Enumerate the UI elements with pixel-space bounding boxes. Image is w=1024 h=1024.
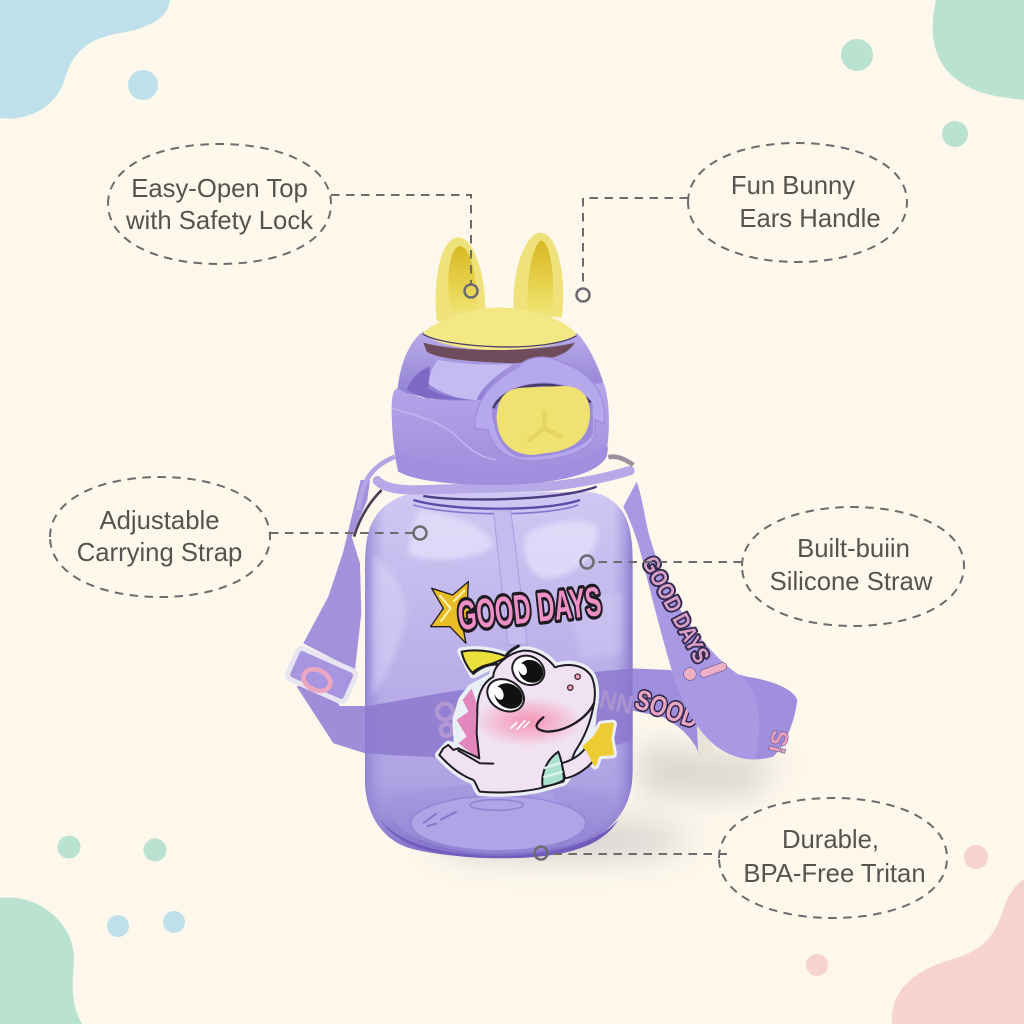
button recess	[492, 382, 593, 457]
callout: bunny ears handle	[576, 143, 907, 302]
collar highlight curve	[393, 408, 497, 460]
strap exclamation	[684, 661, 728, 680]
held star	[584, 724, 613, 765]
GOOD DAYS lettering: GOOD DAYS	[455, 578, 603, 639]
sticker: dinosaur	[439, 646, 613, 792]
bottle illustration	[286, 233, 797, 858]
yellow lid	[423, 307, 577, 350]
button frame	[475, 357, 605, 461]
connector: ears pin	[576, 198, 688, 302]
back strap right	[630, 668, 713, 755]
ghost lettering through bottle: NN	[597, 684, 636, 720]
cheek blush	[473, 697, 583, 747]
strap loop right	[608, 457, 633, 465]
connector: lid pin	[331, 195, 478, 298]
callout: easy-open top: Easy-Open Top	[131, 175, 308, 203]
strap left lower	[297, 680, 367, 754]
bottle base	[389, 784, 612, 853]
neck dark line	[423, 487, 597, 499]
bottle body	[365, 492, 636, 858]
collar lower shading	[395, 447, 608, 485]
callout: carrying strap	[50, 477, 426, 597]
strap ring	[377, 471, 630, 490]
callout: easy-open top: with Safety Lock	[125, 207, 313, 235]
smile	[537, 703, 594, 732]
callout: carrying strap: Carrying Strap	[77, 539, 242, 567]
ghost lettering through bottle	[437, 684, 636, 736]
callout: BPA-free tritan	[534, 798, 947, 918]
collar	[392, 383, 609, 485]
strap buckle	[286, 647, 357, 703]
dome inner dark shade	[407, 367, 473, 400]
neck rings	[413, 500, 580, 509]
front strap right	[623, 482, 759, 759]
right ear	[513, 233, 563, 317]
dome inner brown band	[423, 343, 575, 363]
strap loop left	[358, 457, 395, 510]
button Y mark	[529, 412, 561, 440]
callout: easy-open top	[108, 144, 478, 298]
blush marks	[511, 721, 529, 729]
strap end marks: !S	[763, 728, 794, 756]
decorative blob: top right green	[933, 0, 1024, 100]
mint sleeve stripes	[542, 752, 564, 787]
eye lower	[481, 673, 530, 718]
callout: silicone straw	[580, 507, 964, 626]
callout: silicone straw: Built-buiin	[797, 535, 910, 563]
glass highlights	[372, 510, 623, 697]
straw	[493, 510, 527, 645]
left ear	[436, 237, 485, 327]
connector: straw pin	[580, 556, 742, 568]
callout: carrying strap: Adjustable	[100, 507, 219, 535]
decorative blob: bottom left green	[0, 897, 82, 1024]
sticker backing	[439, 650, 613, 792]
callout: BPA-free tritan: Durable,	[782, 826, 879, 854]
callout: BPA-free tritan: BPA-Free Tritan	[743, 860, 926, 888]
connector: strap pin	[270, 526, 426, 540]
arm	[562, 743, 597, 778]
white strap tag	[697, 722, 715, 755]
callout: bunny ears handle: Fun Bunny	[731, 172, 855, 200]
eye upper	[507, 650, 550, 691]
sticker: star and GOOD DAYS	[431, 578, 603, 643]
dark strap edge near shoulder	[354, 490, 382, 537]
hat	[462, 650, 507, 674]
decorative blob: top left blue	[0, 0, 170, 119]
spikes	[457, 688, 480, 760]
bottle shadow	[430, 745, 780, 858]
yellow star	[431, 582, 480, 643]
dome inner light panel	[428, 360, 513, 400]
right strap lettering: GOOD DAYS	[637, 552, 715, 667]
strap left upper	[303, 480, 370, 670]
bottle lid assembly	[358, 233, 633, 510]
reversed strap lettering: SOOD	[631, 684, 703, 734]
decorative blob: bottom right pink	[892, 879, 1024, 1024]
dino body	[439, 651, 595, 792]
callout: silicone straw: Silicone Straw	[770, 568, 933, 596]
connector: base pin	[534, 846, 727, 860]
callout: bunny ears handle: Ears Handle	[739, 205, 881, 233]
dark strap band seen through bottle	[365, 668, 633, 758]
arm inner line	[458, 751, 493, 764]
yellow button	[497, 386, 590, 455]
clear upper dome	[397, 332, 605, 407]
nostrils	[568, 674, 580, 690]
straps behind the bottle	[286, 480, 797, 759]
strap end curl	[723, 670, 797, 759]
